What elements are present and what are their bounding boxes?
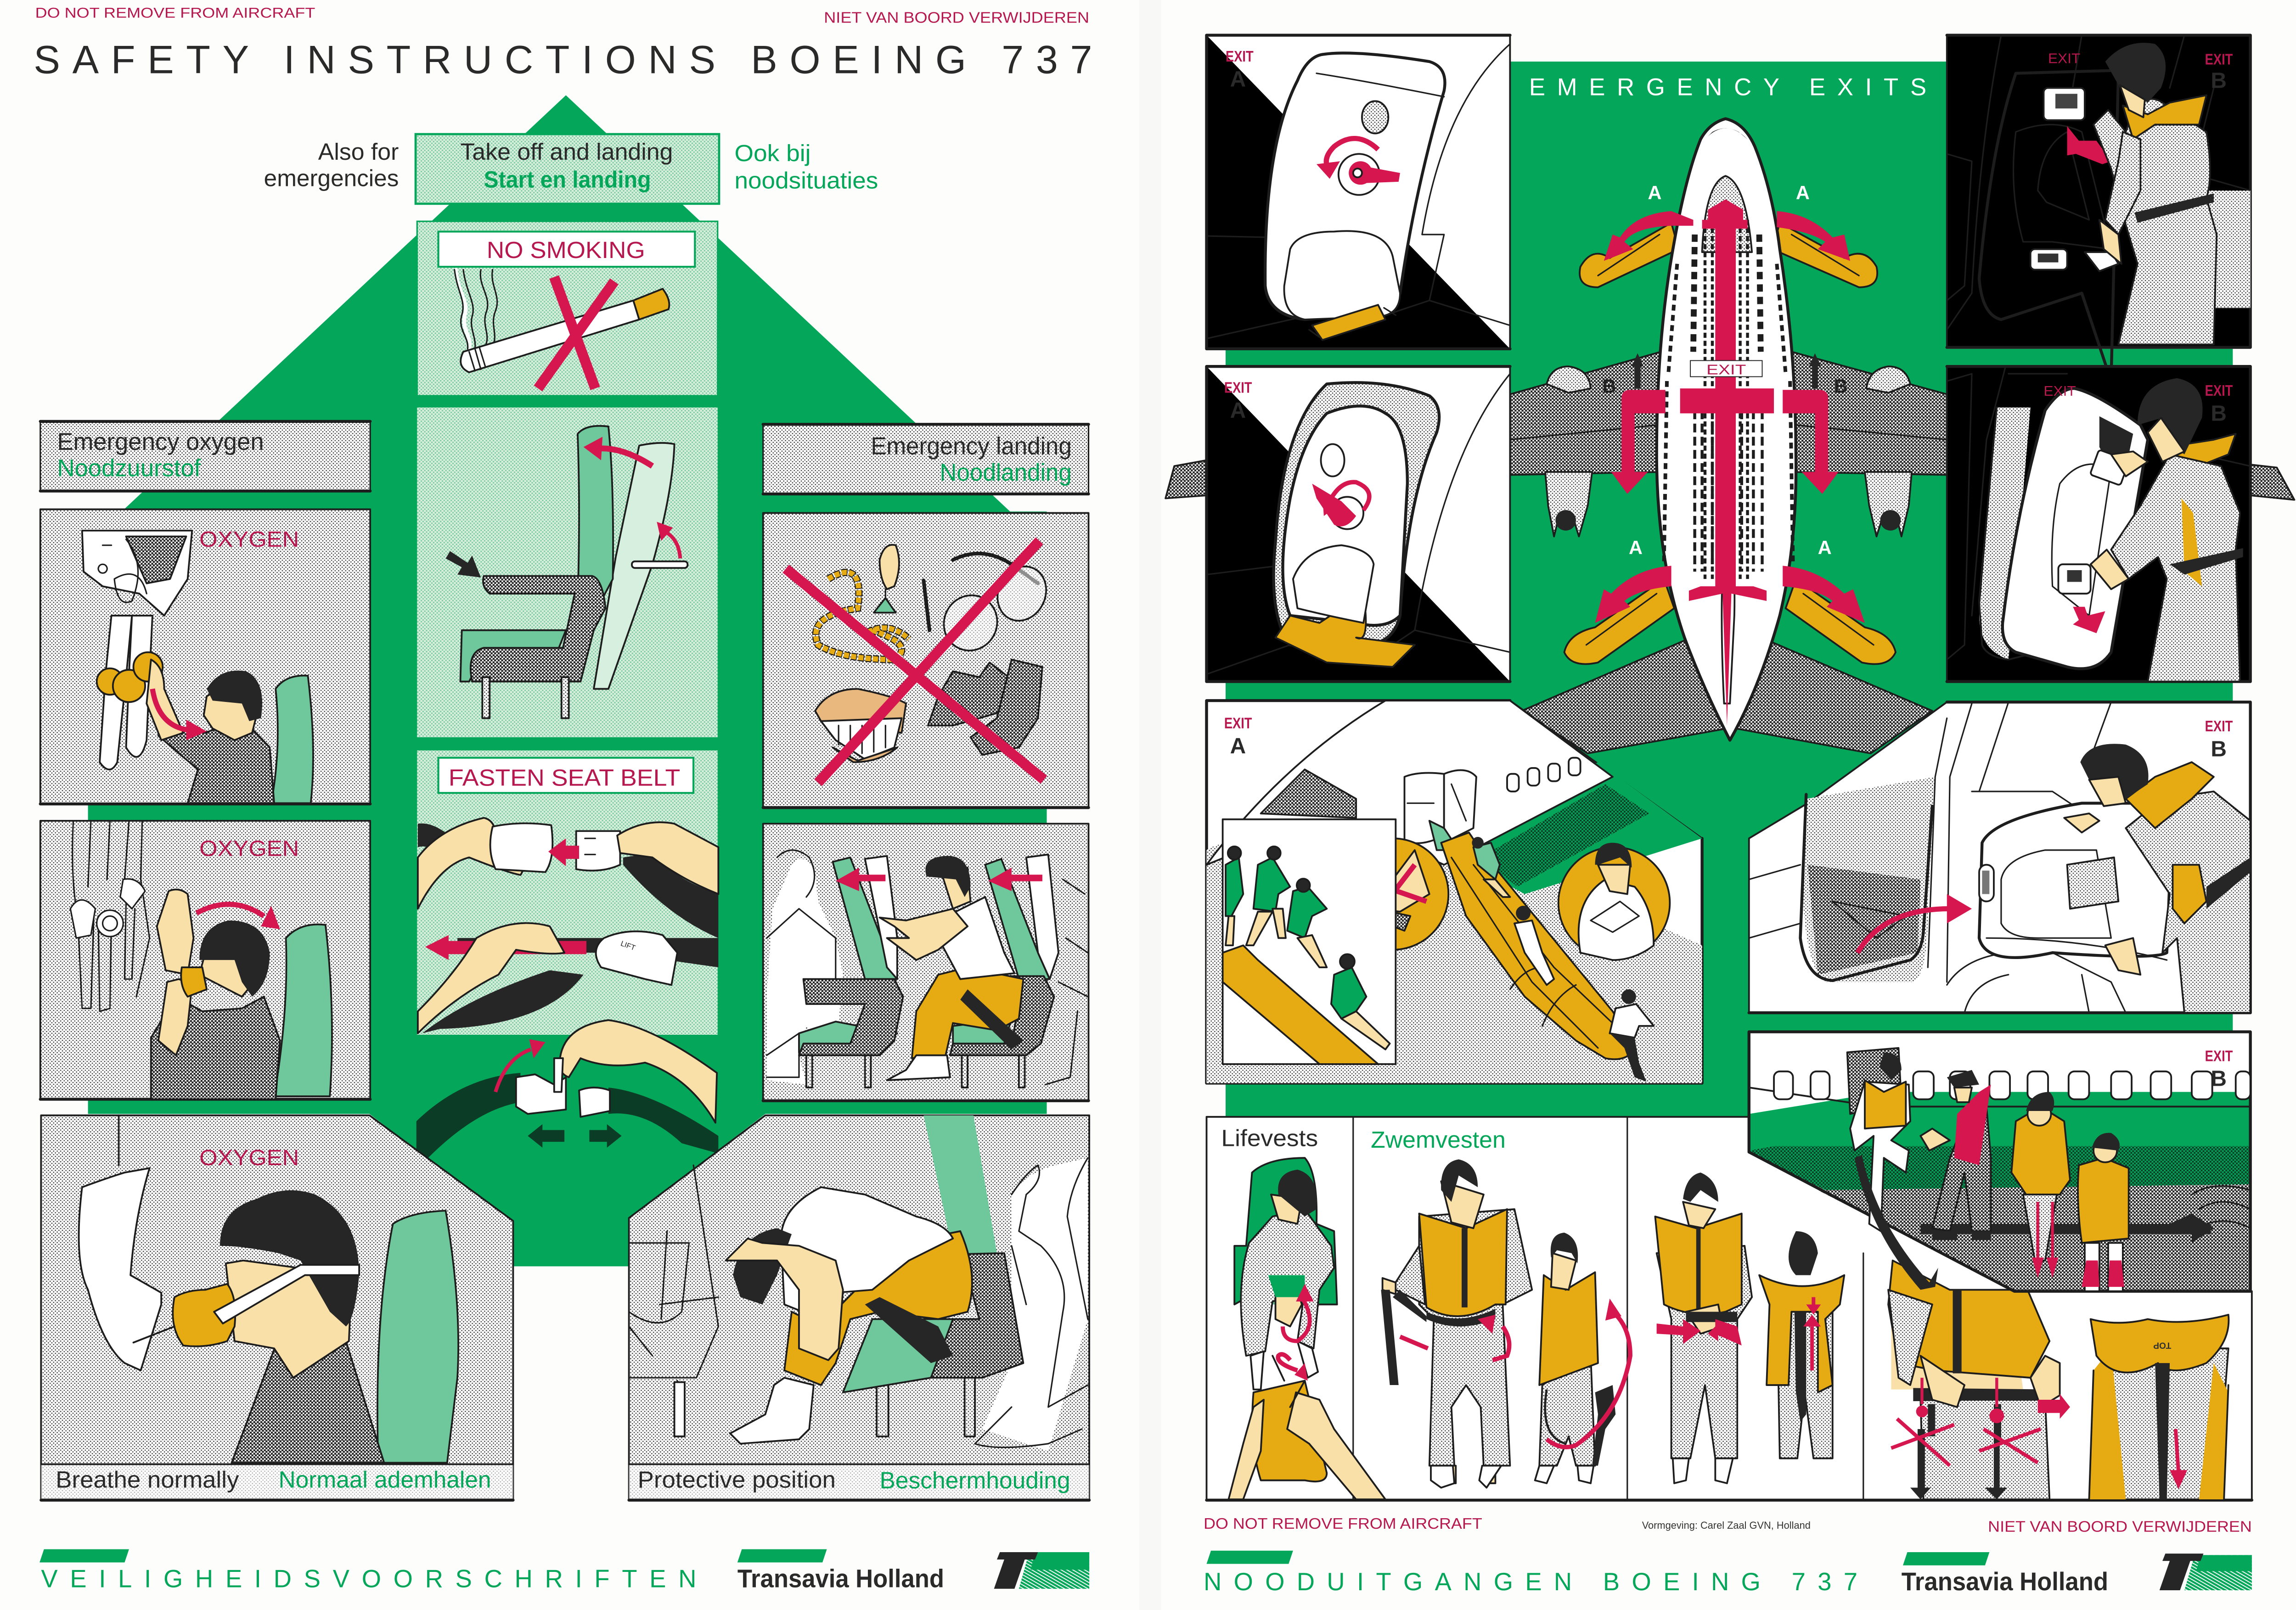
arrow: under seat xyxy=(1283,1284,1314,1341)
box: take off and landing: Start en landing xyxy=(484,167,651,193)
label: ook bij noodsituaties: Ook bij xyxy=(734,140,811,166)
label: exit B: EXIT xyxy=(2205,718,2233,735)
panel: remove sharp objects xyxy=(763,513,1089,808)
panel: breathe normally xyxy=(41,1116,513,1500)
arrow: rotate xyxy=(1322,482,1369,516)
yellow masks xyxy=(97,652,163,702)
person with vest right xyxy=(2078,1133,2129,1291)
label: also for emergencies xyxy=(264,139,399,191)
ground xyxy=(1749,1092,2251,1291)
inset slide xyxy=(1223,945,1378,1064)
oxygen tubes xyxy=(100,616,152,769)
label: zwemvesten: Zwemvesten xyxy=(1371,1127,1506,1153)
door xyxy=(2003,388,2148,669)
red crosses xyxy=(1891,1419,2041,1466)
base and armrest xyxy=(864,1253,1023,1436)
cockpit xyxy=(1705,128,1748,139)
wings xyxy=(1510,352,1947,475)
window xyxy=(1362,101,1388,134)
lower handle xyxy=(2031,249,2067,269)
caption bar xyxy=(629,1464,1089,1500)
icon: cigarette xyxy=(461,289,669,372)
passenger xyxy=(151,890,280,1099)
seat back upright xyxy=(578,426,613,601)
evacuee at bottom xyxy=(1609,989,1654,1082)
oxygen bag xyxy=(79,1116,161,1370)
panel: no smoking xyxy=(417,221,718,396)
person xyxy=(2064,744,2251,1013)
inset: slide posture xyxy=(1223,819,1396,1064)
arrow: rotate xyxy=(1317,139,1378,179)
header: emergency landing xyxy=(763,424,1089,495)
green backdrop: right xyxy=(1226,62,2233,1117)
shoes xyxy=(928,660,1042,755)
circle: heels xyxy=(1337,838,1448,950)
header: emergency landing: Emergency landing xyxy=(871,433,1072,460)
step: vest side view xyxy=(1535,1233,1630,1483)
exit letters: A xyxy=(1648,182,1661,203)
slide pack xyxy=(1284,231,1400,320)
label: exit top: EXIT xyxy=(2043,384,2076,399)
person with vest center xyxy=(2011,1092,2070,1278)
box: take off and landing xyxy=(416,134,719,204)
label: exit B: B xyxy=(2211,737,2227,761)
wing right outer tip xyxy=(2251,465,2294,500)
label: also for emergencies: Also for xyxy=(318,139,399,165)
water spray xyxy=(2192,1186,2251,1228)
panel: mask on face xyxy=(40,821,370,1099)
label: no smoking xyxy=(439,231,695,267)
label: exit B xyxy=(2205,718,2233,761)
panel: door A opening xyxy=(1207,366,1510,682)
open door and exit xyxy=(1405,770,1476,850)
evacuee in white xyxy=(1514,906,1554,985)
top notice: niet van boord: NIET VAN BOORD VERWIJDEREN xyxy=(824,10,1089,27)
arrow: door down xyxy=(2073,607,2105,633)
caption bar: Beschermhouding xyxy=(880,1467,1070,1493)
circle: crossed arms xyxy=(1559,843,1670,960)
hanging masks and tubes xyxy=(70,821,150,1011)
passenger right xyxy=(880,856,1023,1080)
arrow: lift xyxy=(495,1039,546,1092)
arrow: tray xyxy=(657,522,680,558)
label: lifevests: Lifevests xyxy=(1221,1125,1318,1151)
dividers xyxy=(1353,1117,1863,1499)
arrows: apart xyxy=(528,1124,622,1148)
window xyxy=(1321,444,1345,477)
passenger right edge xyxy=(1045,880,1088,1085)
header: emergency oxygen: Emergency oxygen xyxy=(57,428,264,455)
arrow: pull mask xyxy=(152,689,207,740)
label: exit B xyxy=(2205,1048,2233,1091)
footer title: NOODUITGANGEN BOEING 737 xyxy=(1204,1568,1857,1596)
belt release on green xyxy=(416,1020,718,1158)
passenger braced xyxy=(726,1187,972,1444)
logo: transavia xyxy=(994,1552,1089,1589)
windows xyxy=(1774,1071,2251,1099)
step: take from seat xyxy=(1234,1158,1337,1390)
caption bar: Breathe normally xyxy=(56,1467,239,1493)
arrow: over head xyxy=(197,904,280,929)
panel: door B handle xyxy=(1947,35,2251,381)
panel: fasten seat belt xyxy=(417,751,718,1035)
label: fasten seat belt xyxy=(439,758,693,793)
step: vest rear view xyxy=(1759,1231,1844,1459)
header: emergency oxygen xyxy=(40,421,370,492)
dentures xyxy=(815,689,906,762)
label: oxygen: OXYGEN xyxy=(199,837,299,861)
door xyxy=(1283,406,1407,625)
panel: door A slide evacuation xyxy=(1207,701,1702,1083)
exit letters: A xyxy=(1818,537,1832,558)
footer brand: Transavia Holland xyxy=(1902,1567,2108,1596)
armrest and frame xyxy=(471,576,606,682)
exit letters: A xyxy=(1796,182,1810,203)
evacuee on slide xyxy=(1472,837,1510,897)
door handle xyxy=(1339,154,1400,195)
label: exit A xyxy=(1224,380,1252,423)
arrow: off wing xyxy=(2170,1214,2214,1243)
box: take off and landing: Take off and landing xyxy=(460,139,673,165)
label: fasten seat belt: FASTEN SEAT BELT xyxy=(449,764,680,791)
panel: on the wing xyxy=(1749,1032,2251,1291)
title: SAFETY INSTRUCTIONS BOEING 737 xyxy=(34,38,1092,82)
belt tighten: LIFT xyxy=(619,940,636,952)
engines xyxy=(1545,472,1912,537)
footer bar xyxy=(1207,1551,1293,1564)
seat right xyxy=(950,854,1058,1088)
door xyxy=(1979,70,2118,381)
seat xyxy=(271,676,313,803)
label: ook bij noodsituaties xyxy=(734,140,878,193)
footer title: VEILIGHEIDSVOORSCHRIFTEN xyxy=(41,1565,696,1593)
yellow bar xyxy=(1309,305,1396,340)
tray table xyxy=(632,561,687,568)
footer credit: Vormgeving: Carel Zaal GVN, Holland xyxy=(1642,1520,1811,1531)
red escape routes xyxy=(1595,199,1865,725)
top notice: do not remove: DO NOT REMOVE FROM AIRCRAFT xyxy=(35,4,315,21)
seat xyxy=(377,1211,458,1463)
door being lifted xyxy=(1979,803,2177,960)
header: emergency oxygen: Noodzuurstof xyxy=(57,455,201,482)
flight attendant xyxy=(1920,1070,1991,1240)
aircraft diagram xyxy=(1510,119,1947,753)
arrow: pull xyxy=(2170,1429,2187,1489)
wing letters: B xyxy=(1834,376,1848,397)
step: put vest on xyxy=(1381,1159,1532,1488)
caption bar: Protective position xyxy=(638,1467,836,1493)
glasses xyxy=(923,554,1055,659)
icon: smoke xyxy=(455,269,497,349)
label: exit B xyxy=(2205,382,2233,426)
lower handle xyxy=(2058,564,2091,594)
label: exit B: EXIT xyxy=(2205,1048,2233,1065)
label: oxygen: OXYGEN xyxy=(199,527,299,552)
panel: door B stow on seat xyxy=(1749,702,2251,1013)
open door xyxy=(1847,1048,1902,1114)
door recess xyxy=(2052,416,2133,616)
step: open pouch xyxy=(1228,1354,1385,1499)
exit label: EXIT xyxy=(1706,363,1746,378)
seat back xyxy=(923,1116,997,1253)
door handle xyxy=(1312,484,1363,529)
panel: inflate vest close-up xyxy=(1888,1261,2228,1499)
wing letters xyxy=(1603,376,1848,397)
label: exit B: B xyxy=(2211,401,2227,426)
fuselage xyxy=(1657,119,1796,740)
person xyxy=(2093,43,2217,344)
door opening xyxy=(1801,777,1935,982)
title: emergency exits: EMERGENCY EXITS xyxy=(1529,74,1926,101)
label: exit A: EXIT xyxy=(1226,48,1254,65)
seat left xyxy=(629,1165,718,1436)
footer notice: do not remove: DO NOT REMOVE FROM AIRCRAFT xyxy=(1204,1515,1482,1532)
card: left safety instructions xyxy=(0,0,1139,1610)
label: exit A xyxy=(1224,715,1252,758)
footer brand bar xyxy=(737,1549,827,1562)
earring xyxy=(874,545,899,613)
arrows: straps xyxy=(1803,1297,1821,1370)
fuselage stripe xyxy=(1749,1088,2251,1106)
close-up back: TOP xyxy=(2153,1340,2171,1350)
slide pack and fabric xyxy=(1276,545,1415,667)
oxygen mask xyxy=(134,1265,359,1346)
footer bar xyxy=(39,1549,129,1562)
seat block xyxy=(1664,176,1793,579)
logo: transavia xyxy=(2160,1554,2252,1590)
seat xyxy=(274,925,332,1096)
panel: seat upright xyxy=(417,408,718,737)
label: ook bij noodsituaties: noodsituaties xyxy=(734,167,878,193)
door opening xyxy=(1274,382,1439,645)
label: no smoking: NO SMOKING xyxy=(487,237,645,263)
label: exit A: A xyxy=(1230,734,1246,758)
label: exit B: B xyxy=(2211,1067,2227,1091)
label: exit top: EXIT xyxy=(2048,51,2080,66)
tailplanes xyxy=(1522,640,1932,753)
person xyxy=(2091,378,2243,682)
close-up front xyxy=(1888,1261,2070,1499)
step: fasten front xyxy=(1655,1172,1752,1483)
arrow: button xyxy=(446,551,481,578)
caption bar: Normaal ademhalen xyxy=(279,1467,491,1493)
arrow: around xyxy=(1547,1299,1630,1447)
arrows: strap xyxy=(1400,1315,1509,1360)
slide xyxy=(1441,832,1635,1059)
panel: protective position xyxy=(629,1116,1089,1500)
cabin lines xyxy=(1749,702,2126,1013)
frame and cabin xyxy=(1947,366,2251,660)
panel: brace seatbacks xyxy=(763,824,1089,1101)
passenger hair xyxy=(220,1190,359,1326)
passenger right xyxy=(975,1158,1088,1451)
seat cushion xyxy=(460,630,566,682)
inset people xyxy=(1226,847,1390,1049)
label: exit A xyxy=(1226,48,1254,91)
panel: oxygen masks drop xyxy=(40,509,370,804)
label: exit A: EXIT xyxy=(1224,715,1252,732)
panel border xyxy=(1749,1032,2251,1291)
label: oxygen: OXYGEN xyxy=(199,1146,299,1170)
arrow: right xyxy=(2038,1394,2070,1419)
cabin lines xyxy=(1947,35,2251,330)
header: emergency landing: Noodlanding xyxy=(940,459,1072,486)
exit label xyxy=(1690,360,1762,378)
label: exit B: B xyxy=(2211,69,2227,93)
door handle xyxy=(2043,88,2085,120)
exit letters xyxy=(1629,182,1832,558)
arrow: left seat xyxy=(836,868,885,891)
footer brand bar xyxy=(1903,1552,1989,1565)
passenger xyxy=(146,660,274,803)
arrow: move door xyxy=(1857,894,1972,953)
footer notice: niet van boord: NIET VAN BOORD VERWIJDEREN xyxy=(1988,1518,2252,1535)
belt connect xyxy=(418,818,718,938)
panel: lifevests xyxy=(1207,1117,2252,1500)
fuselage section xyxy=(1207,701,1702,1083)
passenger suit xyxy=(231,1337,384,1463)
card: right emergency exits xyxy=(1161,0,2296,1610)
label: exit A: A xyxy=(1230,67,1246,91)
label: exit A: EXIT xyxy=(1224,380,1252,397)
passenger left xyxy=(767,850,843,1085)
seat back reclined xyxy=(594,443,675,689)
panel: door B pulling out xyxy=(1947,366,2251,682)
belt tighten xyxy=(418,923,718,1033)
oxygen unit xyxy=(82,531,192,616)
green backdrop: left pyramid xyxy=(88,95,1047,1266)
passenger face xyxy=(226,1261,352,1378)
icon: red cross xyxy=(538,277,614,388)
wing exit arrows xyxy=(1632,353,1821,388)
cabin lines xyxy=(1207,44,1510,339)
arrow: pull xyxy=(2067,126,2111,164)
label: exit B: EXIT xyxy=(2205,382,2233,399)
wing left outer tip xyxy=(1165,460,1207,499)
label: exit B: EXIT xyxy=(2205,51,2233,68)
rear person stepping xyxy=(1850,1052,1938,1290)
arrow: recline xyxy=(584,437,653,466)
rudder xyxy=(1722,505,1734,703)
exit letters: A xyxy=(1629,537,1643,558)
arrows: tighten xyxy=(1657,1319,1742,1346)
caption bar xyxy=(41,1464,513,1500)
seat left xyxy=(799,856,903,1088)
footer brand: Transavia Holland xyxy=(737,1564,944,1593)
label: also for emergencies: emergencies xyxy=(264,165,399,191)
label: exit A: A xyxy=(1230,398,1246,423)
label: exit B xyxy=(2205,51,2233,93)
wing letters: B xyxy=(1603,376,1616,397)
seat legs xyxy=(482,677,569,718)
cabin lines xyxy=(1207,374,1510,674)
door xyxy=(1265,53,1445,320)
necklace xyxy=(816,572,909,660)
close-up back xyxy=(2089,1315,2228,1499)
icon: red cross xyxy=(786,541,1044,783)
slides xyxy=(1564,223,1896,664)
panel: door A closed xyxy=(1207,35,1510,349)
arrow: right seat xyxy=(988,868,1042,891)
